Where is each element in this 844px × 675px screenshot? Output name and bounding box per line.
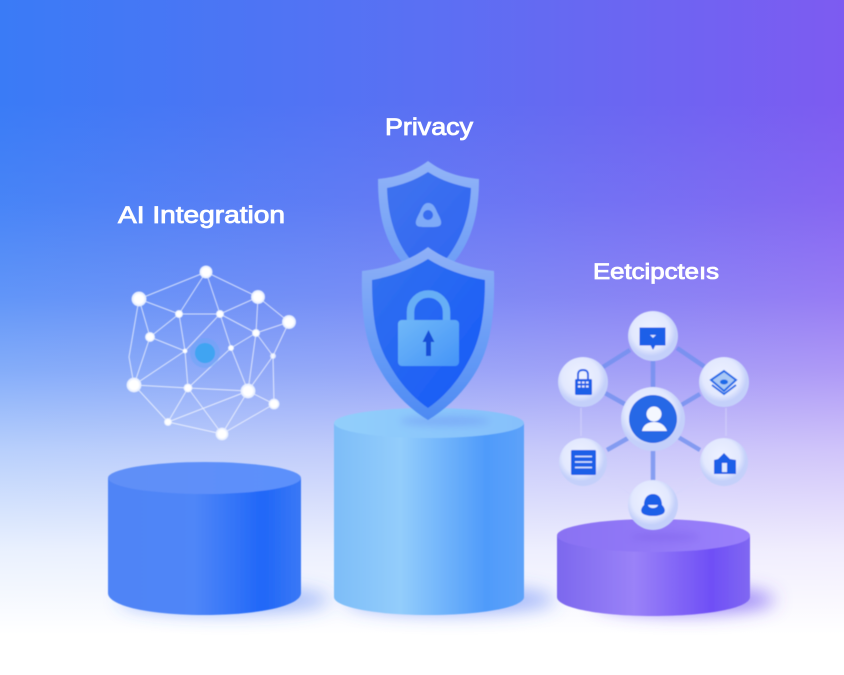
icon: connected services hub bbox=[558, 311, 749, 530]
service: layers bbox=[699, 357, 749, 407]
network nodes bbox=[126, 266, 296, 440]
service: document bbox=[559, 438, 607, 486]
small shield keyhole bbox=[416, 203, 441, 227]
icon: small shield bbox=[378, 161, 479, 271]
cylinder shadows bbox=[120, 586, 775, 614]
icon: large shield with padlock bbox=[362, 247, 494, 420]
heading: AI Integration: AI Integration bbox=[118, 202, 285, 229]
icon: neural network graph bbox=[126, 266, 296, 440]
podium: Privacy bbox=[334, 408, 524, 615]
central user bbox=[621, 387, 685, 451]
podium: AI Integration bbox=[108, 462, 301, 615]
network core bbox=[190, 338, 220, 368]
service: chat bbox=[628, 311, 678, 361]
padlock bbox=[398, 294, 459, 366]
heading: Privacy: Privacy bbox=[385, 114, 473, 141]
service: person silhouette bbox=[628, 480, 678, 530]
heading: Eetcipcteis: Eetcipcteıs bbox=[593, 259, 719, 284]
hub connectors bbox=[581, 348, 726, 494]
service: home bbox=[700, 438, 748, 486]
podium: Eetcipcteis bbox=[557, 519, 750, 616]
service: padlock bbox=[558, 357, 608, 407]
